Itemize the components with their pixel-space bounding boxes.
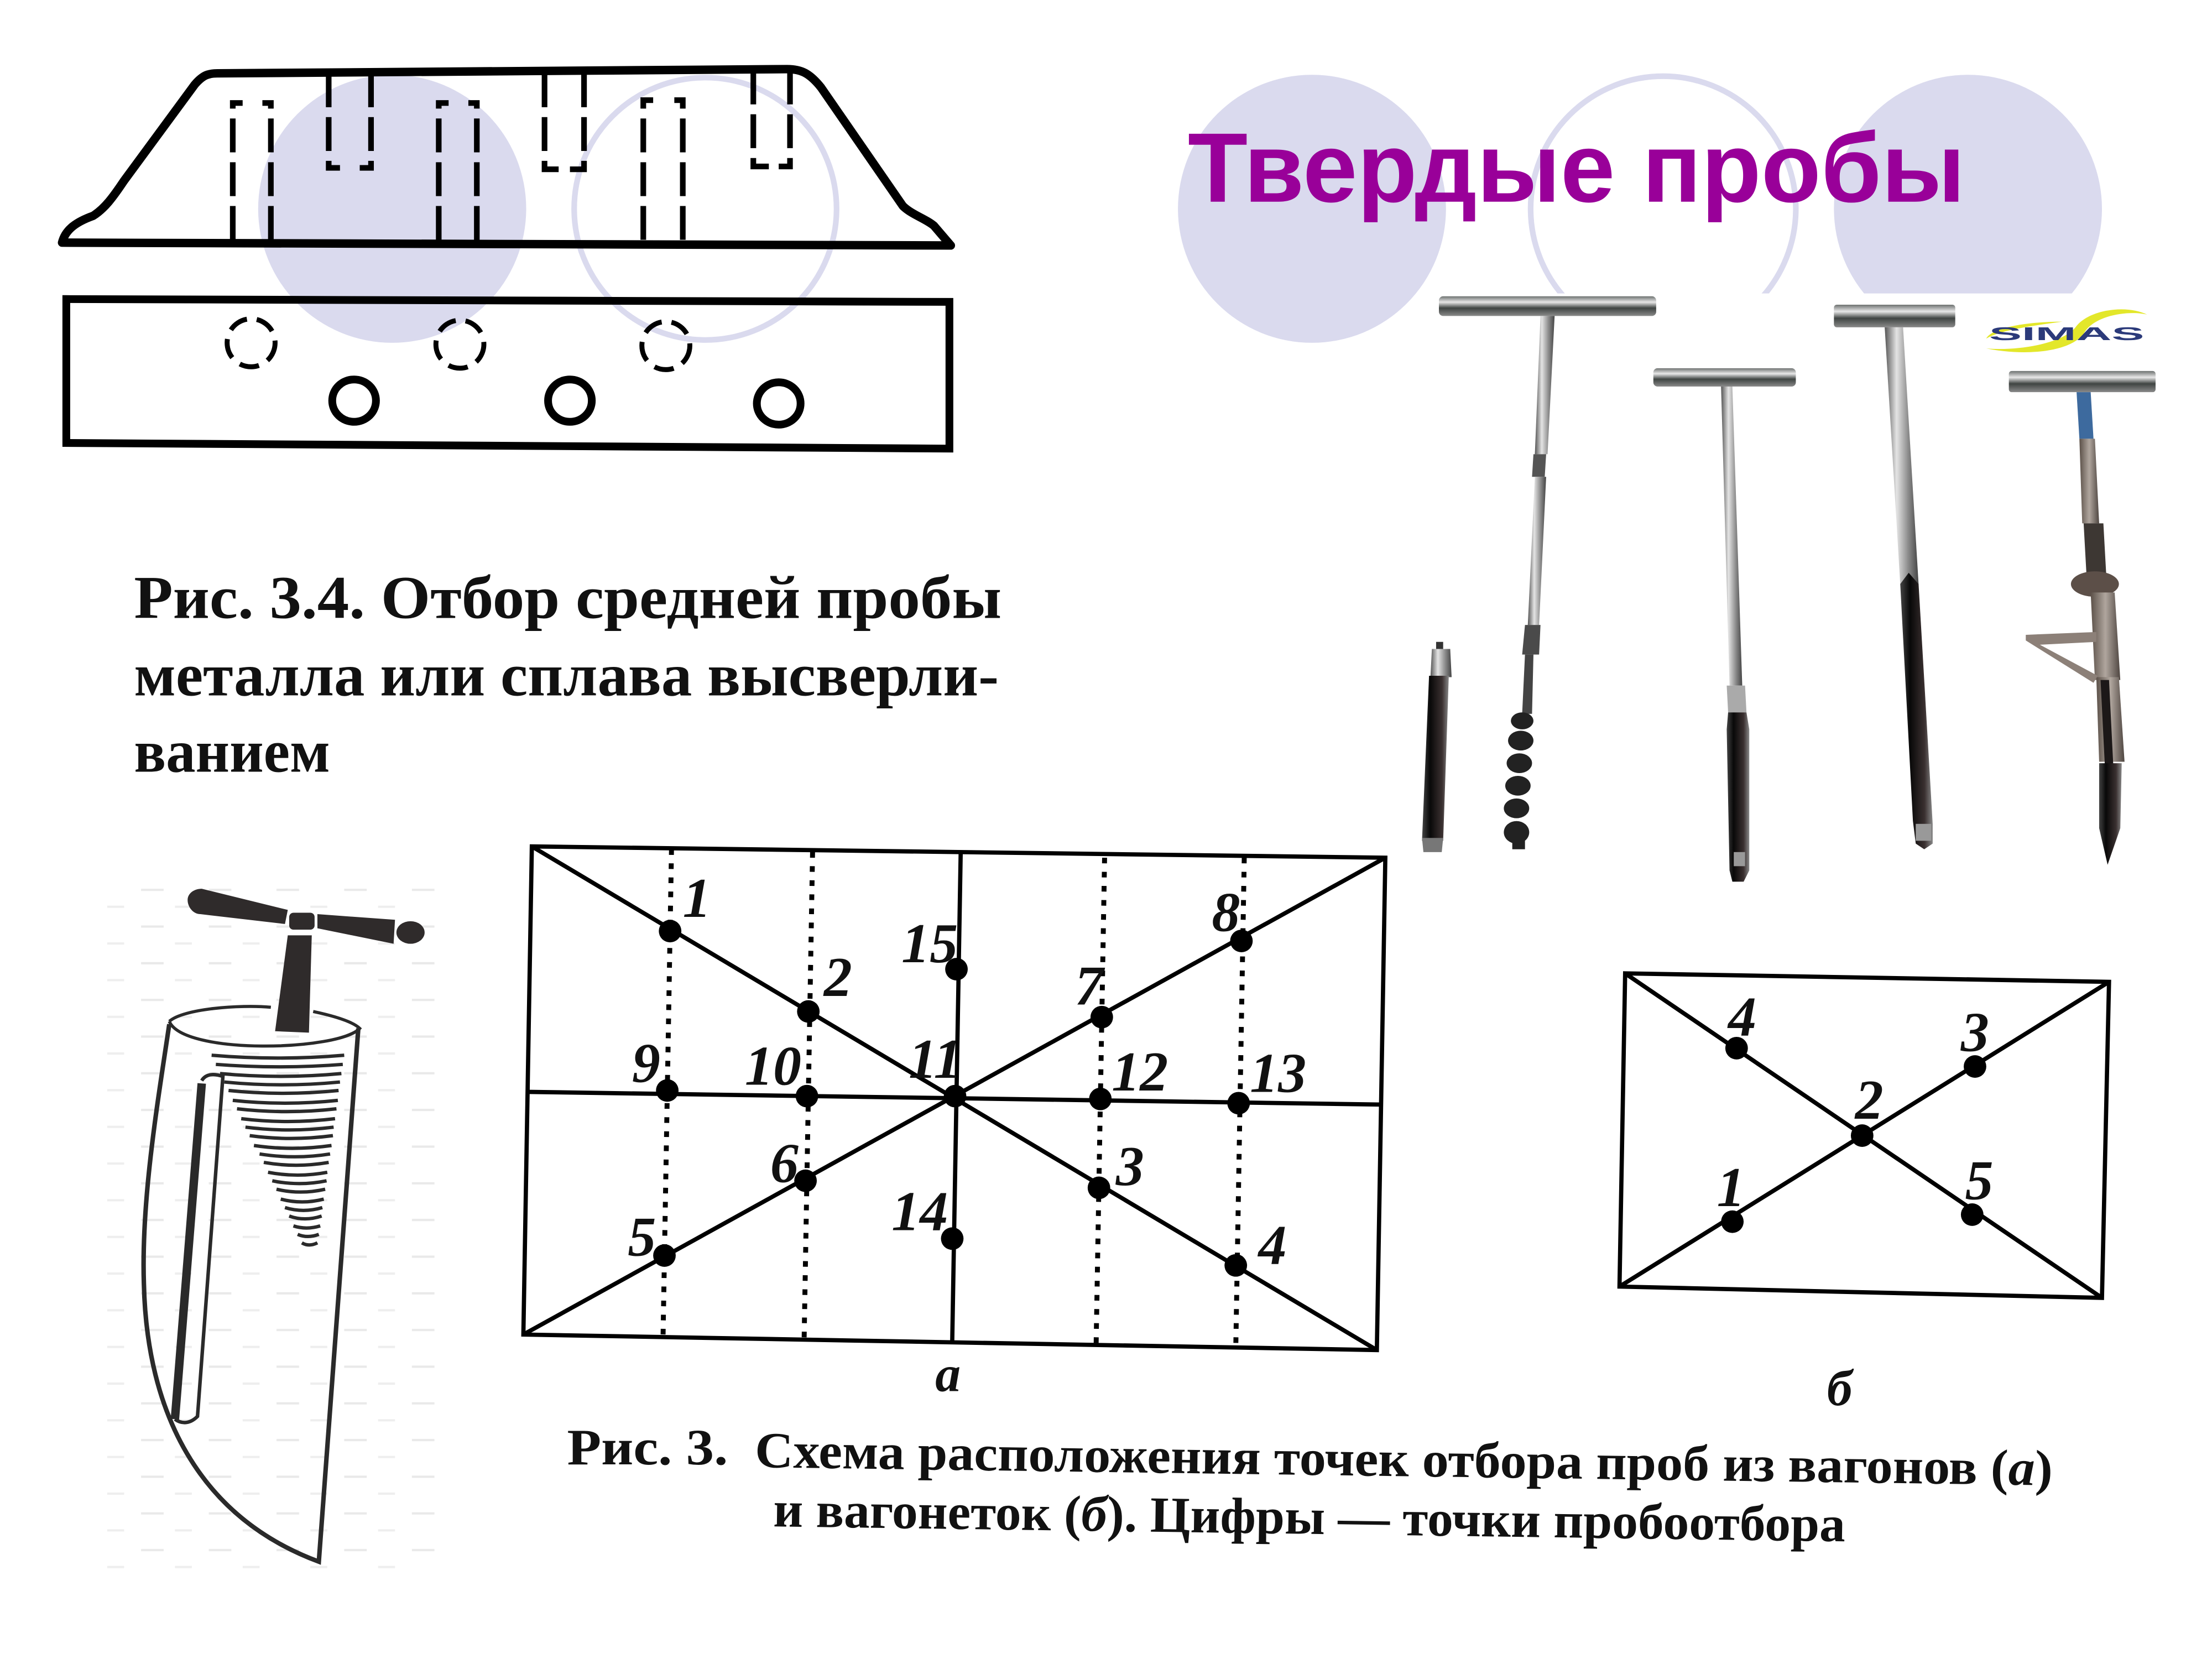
caption: figure 3.4: металла или сплава высверли-: [134, 641, 999, 709]
illustration: hand sampling tool with cone: [96, 881, 435, 1580]
point numbers: 11: [909, 1028, 962, 1091]
point numbers: 4: [1258, 1214, 1287, 1277]
caption: figure 3.4: ванием: [134, 717, 330, 785]
tool: T-handle sampler, medium: [1653, 368, 1796, 881]
point numbers: 7: [1075, 954, 1105, 1017]
tool: small sampler insert: [1422, 642, 1452, 852]
ingot outline: [62, 69, 951, 246]
point numbers: 10: [745, 1035, 801, 1098]
label b: б: [1827, 1360, 1854, 1416]
point numbers: 5: [1965, 1149, 1994, 1212]
tool: stepped sampler with flange: [2009, 371, 2156, 865]
drilled channels: [233, 71, 790, 240]
point numbers: 6: [770, 1133, 799, 1195]
point numbers: [1717, 985, 1994, 1219]
point numbers: 5: [628, 1206, 656, 1268]
caption: figure 3: Схема расположения точек отбора проб из вагонов ( а): [755, 1422, 2053, 1496]
point numbers: 13: [1250, 1042, 1306, 1104]
slot: [175, 1083, 202, 1419]
point numbers: 12: [1112, 1041, 1168, 1103]
sample points: [1721, 1037, 1986, 1233]
point numbers: 14: [891, 1180, 948, 1243]
point numbers: 9: [632, 1032, 660, 1095]
logo: SIMAS: SIMAS: [1989, 324, 2145, 345]
point numbers: 15: [901, 912, 958, 975]
diagram: ingot side view with drilling points: [62, 69, 951, 246]
point numbers: 1: [1717, 1156, 1745, 1219]
caption: figure 3: [567, 1419, 2053, 1552]
tool: T-handle sampler, wide tube: [1834, 305, 1955, 849]
hatched cone: [212, 1055, 344, 1245]
sample points: [653, 920, 1253, 1277]
point numbers: 3: [1960, 1001, 1989, 1064]
point numbers: 8: [1212, 881, 1240, 944]
grid lines: [523, 847, 1385, 1350]
caption: figure 3.4: [134, 564, 1001, 785]
point numbers: 1: [683, 867, 711, 930]
point numbers: 2: [823, 946, 852, 1009]
dotted lines: [663, 849, 1244, 1347]
caption: figure 3.4: Рис. 3.4. Отбор средней пробы: [134, 564, 1001, 631]
title: Твердые пробы: [1188, 112, 1965, 223]
point numbers: 3: [1115, 1135, 1144, 1198]
logo: SIMAS: [1986, 309, 2147, 352]
caption: figure 3: и вагонеток (б). Цифры — точки пробоотбора: [773, 1481, 1846, 1552]
grid lines: [1620, 973, 2109, 1298]
diagram a: sampling points for wagons: [523, 847, 1385, 1350]
tool: auger on extension rods: [1439, 296, 1656, 849]
T-handle: [187, 889, 425, 1032]
label a: а: [935, 1345, 961, 1402]
diagram b: sampling points for trolleys: [1620, 973, 2109, 1298]
background circles: [258, 75, 2102, 343]
sampler body: [144, 1024, 358, 1562]
point numbers: 4: [1727, 985, 1756, 1048]
caption: figure 3: Рис. 3.: [567, 1419, 728, 1475]
point numbers: [628, 867, 1306, 1277]
panel: photo of sampling tools: [1419, 294, 2156, 886]
point numbers: 2: [1854, 1069, 1884, 1131]
diagram: ingot top view with drill holes: [66, 299, 950, 448]
